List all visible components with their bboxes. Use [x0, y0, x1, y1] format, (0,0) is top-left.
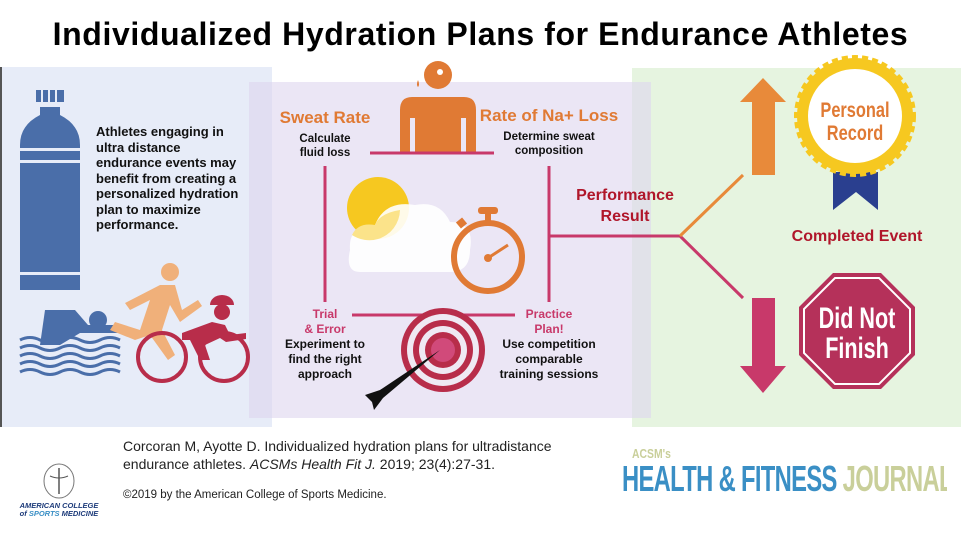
text: citation: endurance athletes. ACSMs Health Fit J. 2019; 23(4):27-31.	[123, 456, 495, 472]
text: trial & error: find the right	[288, 352, 362, 366]
connector lines	[325, 153, 743, 315]
text: sweat rate: fluid loss	[300, 147, 350, 159]
logo: ACSM: of SPORTS MEDICINE	[20, 509, 98, 518]
icon: stopwatch	[454, 214, 522, 291]
icon: sweating person	[400, 61, 476, 152]
text: intro: plan to maximize	[96, 202, 201, 216]
logo: ACSM: AMERICAN COLLEGE	[20, 501, 98, 510]
text: practice plan: Plan!	[534, 322, 564, 336]
icon: personal record badge	[797, 58, 913, 210]
icon: sun and cloud	[347, 177, 471, 272]
icon: stop sign	[799, 273, 915, 389]
icon: water bottle	[20, 90, 80, 290]
text: trial & error: & Error	[304, 322, 346, 336]
arrow: up orange	[740, 78, 786, 175]
arrow: down pink	[740, 298, 786, 393]
panel: right background	[632, 68, 961, 427]
text: intro: performance.	[96, 217, 178, 232]
icon: stop sign: Did Not	[819, 300, 896, 335]
text: copyright: ©2019 by the American College of Sports Medicine.	[123, 489, 387, 501]
logo: health & fitness journal: ACSM's	[632, 446, 671, 461]
text: intro: personalized hydration	[96, 186, 238, 201]
icon: stop sign: Finish	[825, 330, 889, 365]
panel: middle background	[249, 82, 651, 418]
text: trial & error: Experiment to	[285, 337, 365, 351]
text: practice plan	[500, 307, 598, 381]
text: trial & error	[285, 307, 365, 381]
text: completed event: Completed Event	[792, 228, 922, 245]
text: intro: benefit from creating a	[96, 170, 236, 186]
text: trial & error: approach	[298, 367, 352, 381]
panel: left background	[0, 67, 272, 427]
text: sweat rate	[299, 133, 351, 159]
text: Na loss: composition	[515, 145, 583, 157]
heading: performance result: Performance	[576, 187, 674, 204]
icon: target with dart	[365, 308, 485, 410]
text: citation: Corcoran M, Ayotte D. Individualized hydration plans for ultradistance	[123, 438, 552, 454]
text: practice plan: Use competition	[502, 337, 596, 351]
text: practice plan: comparable	[515, 352, 583, 366]
text: practice plan: training sessions	[500, 367, 598, 381]
text: intro: endurance events may	[96, 155, 236, 170]
heading: sweat rate: Sweat Rate	[280, 108, 370, 127]
logo: ACSM	[20, 464, 99, 518]
text: citation	[123, 438, 552, 472]
text: practice plan: Practice	[526, 307, 572, 321]
text: trial & error: Trial	[313, 307, 337, 321]
text: intro: Athletes engaging in	[96, 124, 224, 139]
heading: Na loss: Rate of Na+ Loss	[480, 106, 618, 125]
icon: athletes	[20, 263, 248, 381]
text: sweat rate: Calculate	[299, 133, 351, 145]
text: Na loss: Determine sweat	[503, 131, 595, 143]
text: intro	[96, 124, 238, 232]
icon: personal record badge: Record	[827, 121, 883, 144]
title: Individualized Hydration Plans for Endurance Athletes	[53, 16, 908, 52]
icon: personal record badge: Personal	[820, 98, 890, 121]
text: Na loss	[503, 131, 595, 157]
heading: performance result: Result	[601, 208, 649, 225]
text: intro: ultra distance	[96, 140, 181, 154]
heading: performance result	[576, 187, 674, 225]
